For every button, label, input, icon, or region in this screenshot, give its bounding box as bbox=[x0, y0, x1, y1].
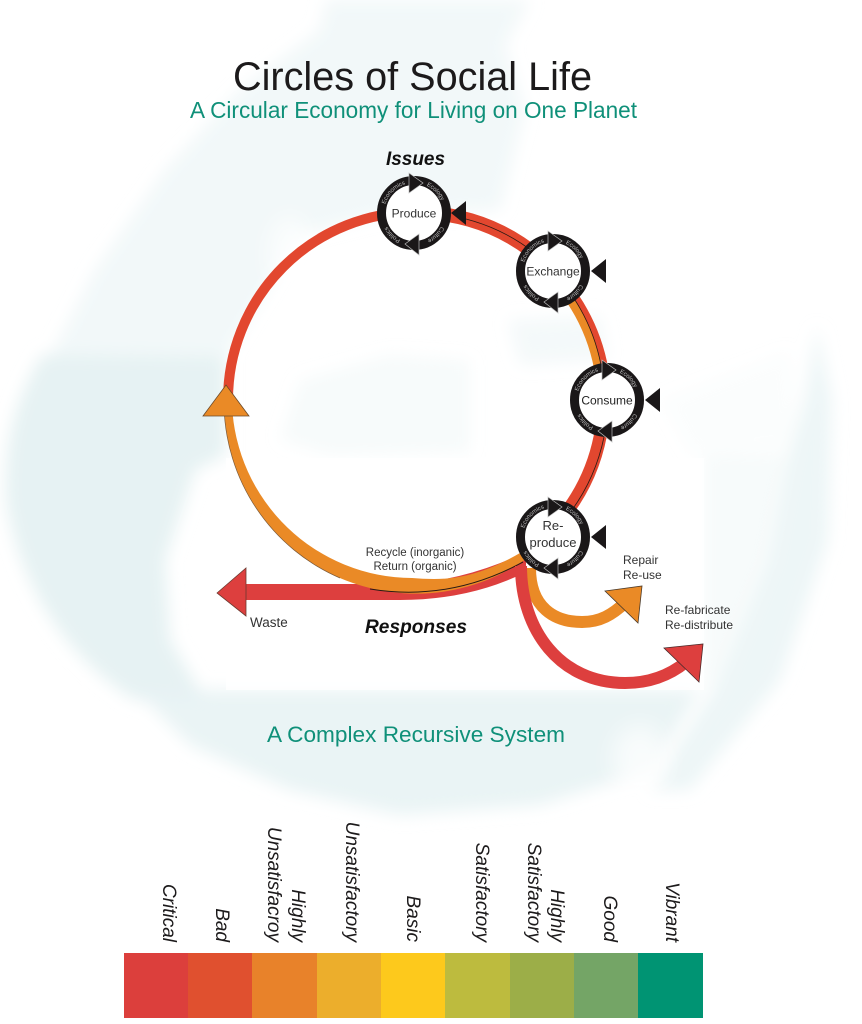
node: exchange bbox=[516, 230, 606, 314]
label: repair and re-use: Repair bbox=[623, 553, 658, 567]
arrow: waste bbox=[217, 568, 246, 616]
node: produce bbox=[377, 172, 466, 256]
node: reproduce: Ecology bbox=[566, 506, 584, 524]
title: Circles of Social Life bbox=[233, 55, 592, 99]
label: recycle and return: Return (organic) bbox=[373, 561, 457, 573]
node: consume: Economics bbox=[574, 368, 598, 391]
scale labels: Satisfactory bbox=[471, 843, 492, 943]
scale labels: Critical bbox=[158, 884, 179, 943]
node: consume: Consume bbox=[581, 394, 633, 408]
node: reproduce: produce bbox=[530, 535, 576, 550]
heading: responses: Responses bbox=[365, 617, 467, 638]
node: produce: Politics bbox=[384, 227, 400, 244]
refabricate arc bbox=[521, 566, 686, 683]
scale labels: Unsatisfactory bbox=[341, 822, 362, 943]
node: exchange: Exchange bbox=[526, 264, 580, 278]
node: reproduce: Culture bbox=[567, 551, 583, 566]
node: consume: Politics bbox=[578, 414, 593, 430]
background: pale globe bbox=[6, 0, 832, 815]
arrow: refabricate bbox=[664, 644, 703, 682]
node: exchange: Politics bbox=[524, 285, 539, 302]
caption: A Complex Recursive System bbox=[267, 722, 565, 747]
node: exchange: Culture bbox=[567, 285, 583, 300]
scale labels: Good bbox=[599, 896, 620, 943]
label: refabricate and redistribute bbox=[665, 603, 733, 632]
label: recycle and return bbox=[366, 547, 464, 573]
scale labels: Unsatisfacroy bbox=[263, 827, 284, 943]
scale labels: Bad bbox=[211, 908, 232, 943]
colour scale bar bbox=[124, 953, 703, 1018]
node: reproduce: Politics bbox=[524, 551, 539, 568]
node: reproduce bbox=[516, 496, 606, 580]
label: repair and re-use: Re-use bbox=[623, 568, 662, 582]
scale labels: Basic bbox=[402, 896, 423, 942]
node: consume bbox=[570, 360, 660, 443]
node: consume: Ecology bbox=[620, 369, 638, 386]
node: produce: Culture bbox=[428, 227, 444, 242]
arrow: cycle upward bbox=[203, 385, 249, 416]
upper left arc bbox=[228, 212, 416, 400]
label: refabricate and redistribute: Re-fabricate bbox=[665, 603, 731, 617]
consume to reproduce arc bbox=[568, 432, 601, 510]
node: reproduce: Re- bbox=[543, 518, 563, 533]
label: repair and re-use bbox=[623, 553, 662, 582]
arrow: repair bbox=[605, 586, 642, 623]
node: exchange: Ecology bbox=[566, 240, 584, 258]
subtitle: A Circular Economy for Living on One Planet bbox=[190, 97, 638, 123]
scale labels bbox=[158, 822, 682, 943]
recycle arc bbox=[224, 405, 526, 594]
scale labels: Highly bbox=[546, 889, 567, 943]
exchange to consume arc bbox=[574, 298, 603, 370]
produce to exchange arc bbox=[448, 215, 530, 250]
waste flow bar bbox=[240, 552, 526, 600]
node: produce: Produce bbox=[392, 206, 437, 220]
label: refabricate and redistribute: Re-distribute bbox=[665, 618, 733, 632]
label: waste: Waste bbox=[250, 615, 288, 630]
label: recycle and return: Recycle (inorganic) bbox=[366, 547, 464, 559]
heading: issues: Issues bbox=[386, 149, 445, 170]
node: produce: Ecology bbox=[427, 182, 444, 200]
node: consume: Culture bbox=[621, 414, 637, 430]
scale labels: Vibrant bbox=[661, 882, 682, 943]
main circular flow bbox=[224, 212, 686, 683]
node: exchange: Economics bbox=[520, 240, 544, 262]
node: produce: Economics bbox=[382, 182, 405, 204]
repair arc bbox=[530, 568, 626, 622]
node: reproduce: Economics bbox=[520, 506, 544, 528]
scale labels: Highly bbox=[287, 889, 308, 943]
scale labels: Satisfactory bbox=[523, 843, 544, 943]
